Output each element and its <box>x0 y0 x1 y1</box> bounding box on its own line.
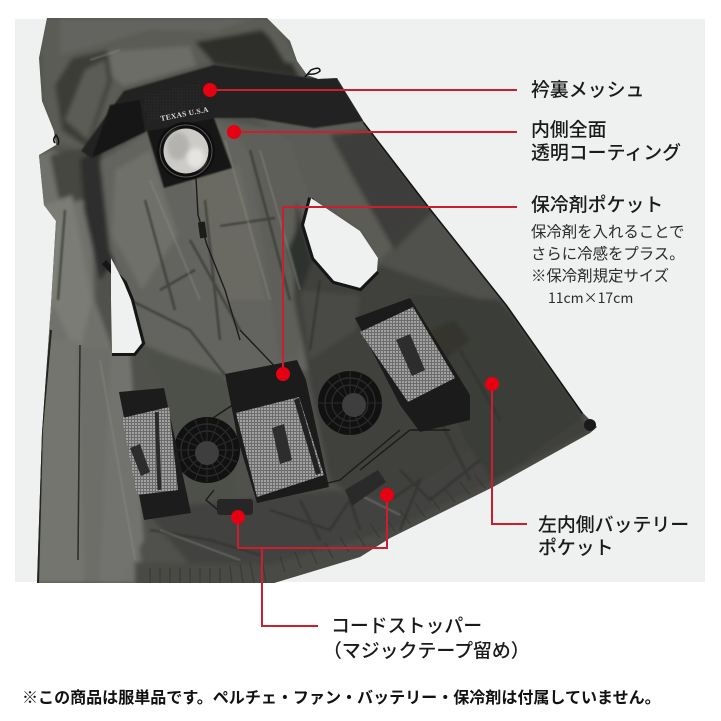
centre pocket <box>225 360 329 503</box>
heading: battery pocket: 左内側バッテリー <box>538 510 689 537</box>
facing zipper line <box>38 330 51 583</box>
callout line: cool pack pocket <box>276 207 517 381</box>
battery pocket strap <box>217 499 253 515</box>
fan patch <box>147 118 232 188</box>
heading: cord stopper: コードストッパー <box>331 611 482 638</box>
heading: cool pack pocket: 保冷剤ポケット <box>531 190 663 217</box>
heading: cord stopper: （マジックテープ留め） <box>323 636 530 663</box>
armhole binding edges <box>304 198 377 288</box>
collar mesh patch <box>142 82 204 122</box>
right pocket <box>355 298 470 432</box>
cord tail <box>195 178 274 365</box>
lower body <box>152 490 392 565</box>
hood outer <box>40 18 315 150</box>
heading: inner coating: 内側全面 <box>531 115 607 142</box>
callout line: collar mesh <box>203 83 517 97</box>
callout line: battery pocket <box>485 377 527 524</box>
text block: cool pack details <box>531 220 685 308</box>
left sleeve flap <box>30 150 144 583</box>
heading: battery pocket: ポケット <box>538 533 614 560</box>
background panel <box>15 19 705 582</box>
text block: cool pack details: 11cm×17cm <box>548 288 633 308</box>
fans <box>174 371 382 483</box>
callout line: inner coating <box>227 125 517 139</box>
hood drawcord <box>305 68 320 77</box>
right panel <box>262 120 390 262</box>
centre torso <box>100 118 310 380</box>
silver pad <box>157 122 215 180</box>
left pocket <box>119 388 191 520</box>
heading: battery pocket <box>538 510 689 560</box>
hem elastic gathers <box>150 475 485 583</box>
footer note: ※この商品は服単品です。ペルチェ・ファン・バッテリー・保冷剤は付属していません。 <box>22 684 661 708</box>
text block: cool pack details: 保冷剤を入れることで <box>531 220 684 242</box>
fabric wrinkles <box>58 150 500 555</box>
left drawcord <box>54 135 59 145</box>
right battery cable pack <box>345 470 386 506</box>
text block: cool pack details: ※保冷剤規定サイズ <box>531 264 669 286</box>
heading: inner coating: 透明コーティング <box>531 138 681 165</box>
label: TEXAS U.S.A: TEXAS U.S.A <box>160 105 210 123</box>
heading: inner coating <box>531 115 681 165</box>
outer right zipper edge <box>364 122 583 413</box>
text block: cool pack details: さらに冷感をプラス。 <box>531 242 685 264</box>
jacket <box>30 18 610 590</box>
heading: cord stopper <box>323 611 530 663</box>
hem cord end <box>584 419 596 431</box>
collar <box>81 65 364 188</box>
heading: collar mesh: 衿裏メッシュ <box>531 75 644 102</box>
callout line: cord stopper <box>231 488 394 626</box>
